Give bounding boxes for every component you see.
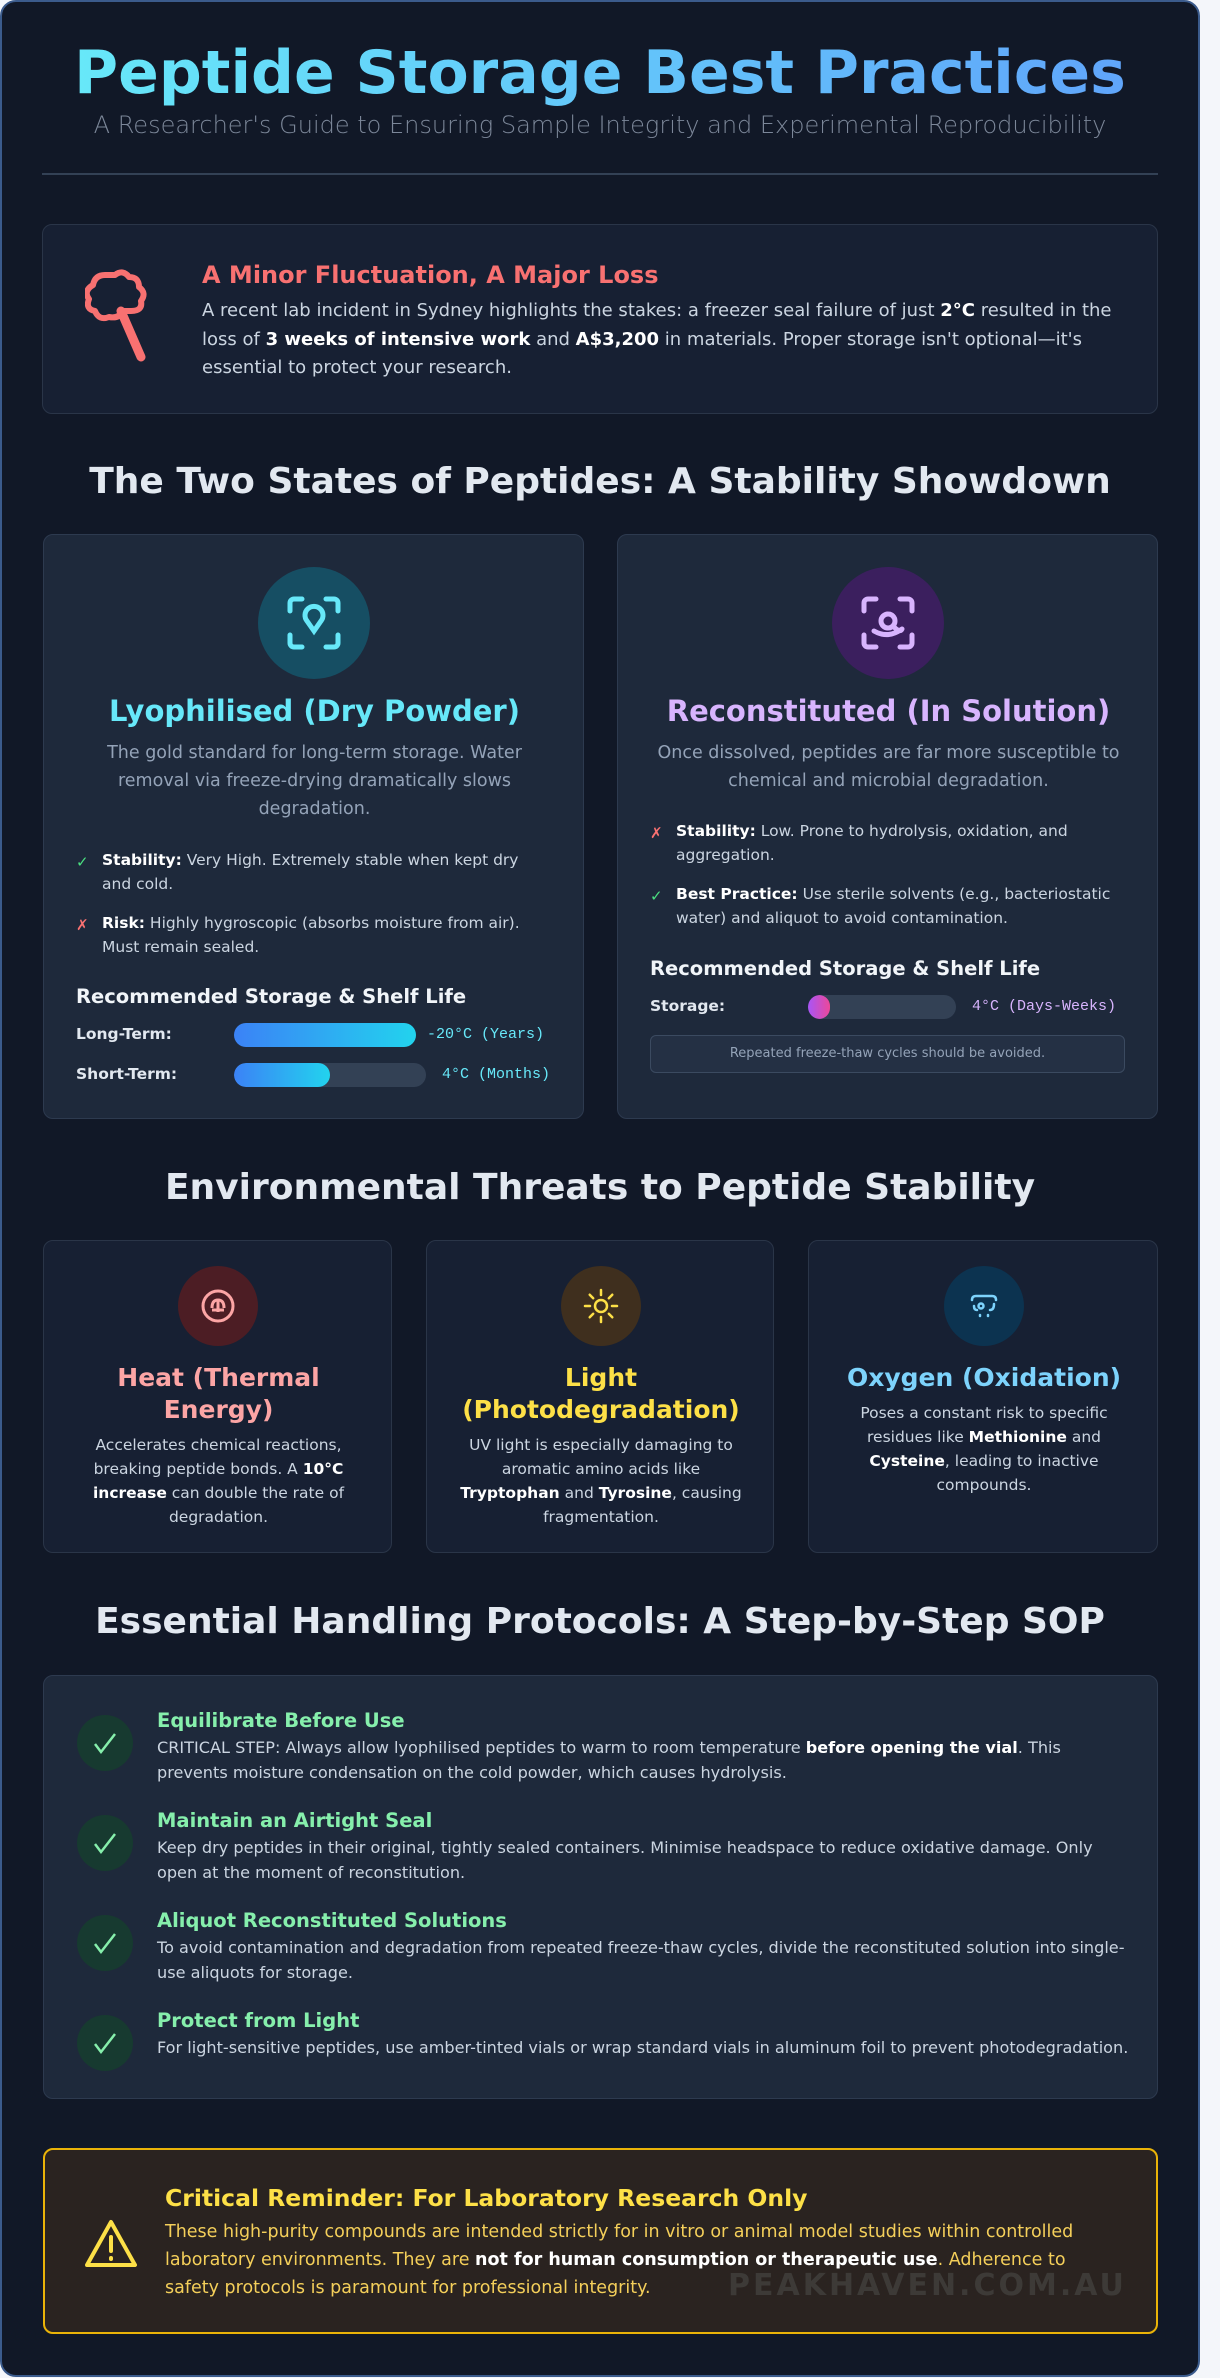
heading: threats: Environmental Threats to Peptide Stability [165,1167,1035,1208]
text: Accelerates chemical reactions, breaking peptide bonds. A 10°C increase can double the rate of degradation. [93,1436,344,1526]
heading: protocols: Essential Handling Protocols: A Step-by-Step SOP [95,1601,1105,1642]
step 2: Keep dry peptides in their original, tightly sealed containers. Minimise headspace to reduce oxidative damage. Only open at the moment of reconstitution. [157,1838,1093,1882]
icon: solution [832,567,944,679]
icon: powder [258,567,370,679]
alert heading: A Minor Fluctuation, A Major Loss [202,261,659,289]
storage heading: Recommended Storage & Shelf Life [650,957,1040,980]
bar: storage: Storage: [650,997,725,1015]
step 1: Equilibrate Before Use [157,1709,405,1732]
icon: warning [85,2220,138,2267]
title: Reconstituted (In Solution) [667,694,1110,728]
bullet: stability: Stability: Low. Prone to hydrolysis, oxidation, and aggregation. [676,822,1068,864]
text: UV light is especially damaging to aromatic amino acids like Tryptophan and Tyrosine, causing fragmentation. [460,1436,742,1526]
panel: incident alert [42,224,1158,414]
title: Heat (Thermal Energy) [117,1363,320,1424]
step 3: Aliquot Reconstituted Solutions [157,1909,507,1932]
step 4: For light-sensitive peptides, use amber-tinted vials or wrap standard vials in aluminum foil to prevent photodegradation. [157,2038,1128,2057]
description: Once dissolved, peptides are far more susceptible to chemical and microbial degradation. [657,743,1120,791]
bullet: best practice: Best Practice: Use sterile solvents (e.g., bacteriostatic water) and aliquot to avoid contamination. [676,885,1110,927]
panel: reconstituted: ✗ [650,824,663,842]
heading: two states: The Two States of Peptides: A Stability Showdown [89,461,1111,502]
icon: sun [561,1266,641,1346]
panel: lyophilised: ✗ [76,916,89,934]
icon: heat [178,1266,258,1346]
bar: long-term: -20°C (Years) [427,1026,544,1043]
panel: reconstituted [617,534,1158,1119]
text: Poses a constant risk to specific residues like Methionine and Cysteine, leading to inactive compounds. [860,1404,1108,1494]
storage heading: Recommended Storage & Shelf Life [76,985,466,1008]
bar: storage [650,995,1116,1019]
reminder text: These high-purity compounds are intended strictly for in vitro or animal model studies within controlled laboratory environments. They are not for human consumption or therapeutic use. Adherence to safety protocols is paramount for professional integrity. [165,2222,1073,2298]
icon: oxygen [944,1266,1024,1346]
step 4 [77,2009,1128,2071]
panel: reconstituted: ✓ [650,887,663,905]
watermark: PEAKHAVEN.COM.AU [728,2268,1127,2303]
panel: lyophilised [43,534,584,1119]
note box: Repeated freeze-thaw cycles should be avoided. [730,1046,1045,1061]
panel: SOP steps [43,1675,1158,2099]
note box [650,1035,1125,1073]
subtitle: A Researcher's Guide to Ensuring Sample Integrity and Experimental Reproducibility [94,111,1106,139]
bar: short-term: 4°C (Months) [442,1066,550,1083]
panel: heat [43,1240,392,1553]
panel: critical reminder [43,2148,1158,2334]
icon: broken tree / hammer [85,269,147,362]
step 2: Maintain an Airtight Seal [157,1809,432,1832]
title: Light (Photodegradation) [462,1363,740,1424]
bar: short-term: Short-Term: [76,1065,177,1083]
bar: short-term [76,1063,550,1087]
reminder heading: Critical Reminder: For Laboratory Research Only [165,2184,808,2212]
step 3 [77,1909,1125,1982]
step 1: CRITICAL STEP: Always allow lyophilised peptides to warm to room temperature before opening the vial. This prevents moisture condensation on the cold powder, which causes hydrolysis. [157,1738,1061,1782]
panel: oxygen [808,1240,1158,1553]
step 3: To avoid contamination and degradation from repeated freeze-thaw cycles, divide the reconstituted solution into single-use aliquots for storage. [157,1938,1125,1982]
title: Lyophilised (Dry Powder) [109,694,520,728]
title: Oxygen (Oxidation) [847,1363,1121,1392]
bullet: stability: Stability: Very High. Extremely stable when kept dry and cold. [102,851,518,893]
alert text: A recent lab incident in Sydney highlights the stakes: a freezer seal failure of just 2°C resulted in the loss of 3 weeks of intensive work and A$3,200 in materials. Proper storage isn't optional—it's essential to protect your research. [202,300,1112,378]
description: The gold standard for long-term storage. Water removal via freeze-drying dramatically slows degradation. [107,743,522,819]
bar: long-term [76,1023,544,1047]
bullet: risk: Risk: Highly hygroscopic (absorbs moisture from air). Must remain sealed. [102,914,520,956]
step 2 [77,1809,1093,1882]
panel: light [426,1240,774,1553]
panel: lyophilised: ✓ [76,853,89,871]
title: Peptide Storage Best Practices [74,38,1126,108]
step 1 [77,1709,1061,1782]
bar: storage: 4°C (Days-Weeks) [972,998,1116,1015]
bar: long-term: Long-Term: [76,1025,172,1043]
step 4: Protect from Light [157,2009,359,2032]
